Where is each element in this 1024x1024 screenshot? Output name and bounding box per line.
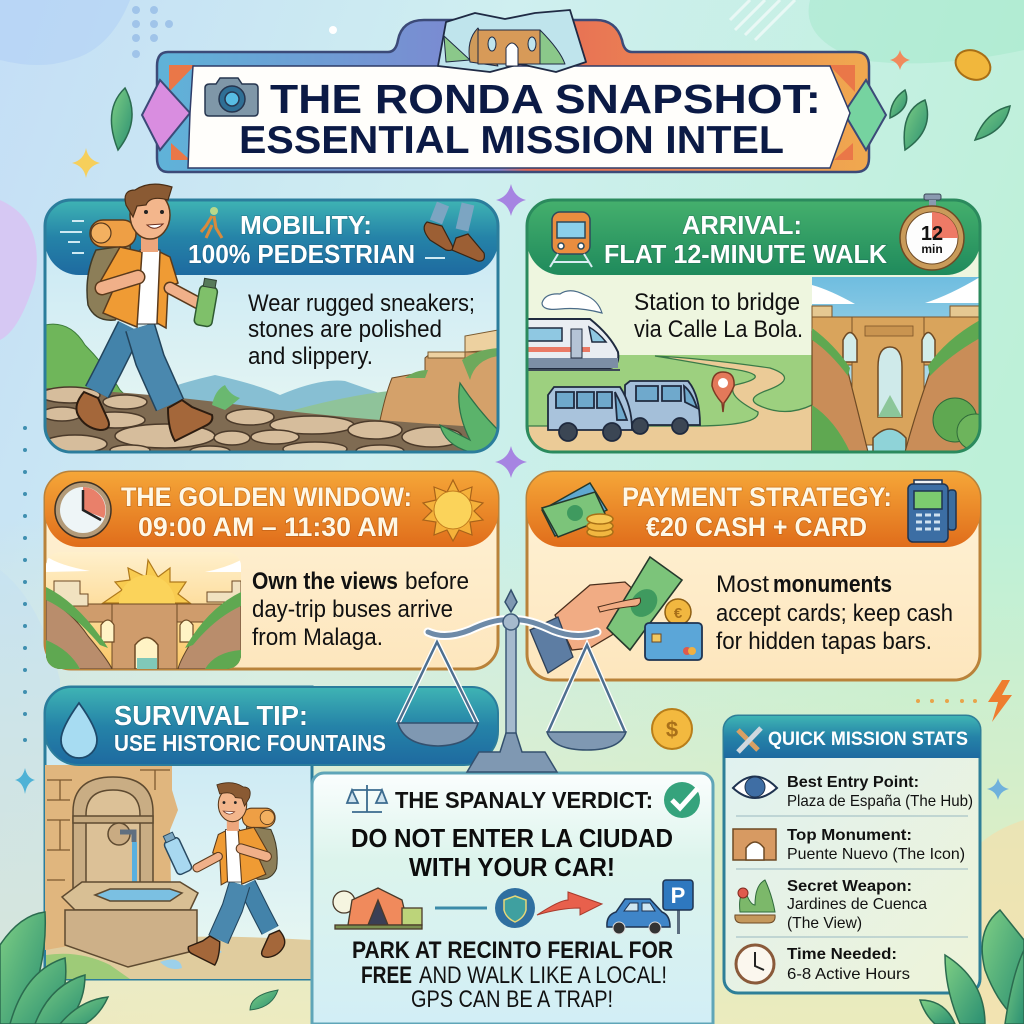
heading: mobility: MOBILITY:: [240, 210, 372, 240]
text: verdict advice: GPS CAN BE A TRAP!: [411, 986, 613, 1013]
stat: time needed: 6-8 Active Hours: [787, 966, 910, 983]
text: verdict advice: [352, 937, 673, 1013]
panel: verdict: [312, 773, 713, 1024]
character: hiker: [76, 184, 219, 441]
mobility scene: [40, 324, 500, 457]
text: golden body: from Malaga.: [252, 624, 383, 651]
text: payment body: [716, 571, 953, 655]
banner plaque: [188, 66, 850, 168]
icon: stopwatch: min: [921, 242, 943, 256]
stat: secret weapon: Jardines de Cuenca: [787, 896, 927, 913]
fountain: [62, 777, 198, 967]
stat: secret weapon: (The View): [787, 915, 862, 932]
icon: sun: [423, 480, 483, 541]
heading: payment: PAYMENT STRATEGY:: [622, 482, 892, 512]
sunrise scene: [46, 552, 241, 669]
arrival frame: [527, 200, 980, 452]
icon: fairground tent: [333, 888, 422, 929]
illustration: hand with cash: €: [674, 605, 683, 622]
heading: verdict: THE SPANALY VERDICT:: [395, 787, 653, 813]
payment header band: [527, 472, 980, 547]
bridge view: [812, 277, 993, 452]
icon: stopwatch: [900, 194, 964, 270]
stats header band: [724, 716, 980, 758]
text: golden body: Own the views: [252, 568, 398, 595]
stat: top monument: [733, 827, 965, 863]
icon: tools: [738, 728, 761, 752]
text: verdict advice: AND WALK LIKE A LOCAL!: [419, 962, 667, 989]
decoration: leaves top: [111, 88, 1010, 150]
fountain scene: [45, 765, 312, 979]
text: arrival body: via Calle La Bola.: [634, 316, 803, 343]
heading: arrival: ARRIVAL:: [682, 210, 802, 240]
text: verdict advice: PARK AT RECINTO FERIAL FOR: [352, 937, 673, 964]
heading: golden window: [121, 482, 412, 542]
panel: arrival: [527, 194, 993, 455]
text: golden body: before: [405, 568, 469, 595]
icon: car and parking: P: [671, 883, 685, 908]
banner frame: [157, 20, 869, 172]
train: [527, 319, 620, 370]
decoration: leaves bottom right: [920, 910, 1024, 1024]
text: mobility body: stones are polished: [248, 316, 442, 343]
title line 2: ESSENTIAL MISSION INTEL: [239, 119, 784, 162]
gem left: [142, 80, 190, 150]
heading: stats: QUICK MISSION STATS: [768, 729, 968, 750]
heading: arrival: FLAT 12-MINUTE WALK: [604, 239, 887, 269]
mobility frame: [45, 200, 498, 452]
text: mobility body: and slippery.: [248, 343, 373, 370]
stat: best entry point: Best Entry Point:: [787, 774, 919, 791]
icon: shield: [495, 888, 535, 928]
heading: golden window: THE GOLDEN WINDOW:: [121, 482, 412, 512]
heading: payment: €20 CASH + CARD: [646, 512, 867, 542]
speed lines: [60, 221, 84, 253]
text: golden body: day-trip buses arrive: [252, 596, 453, 623]
golden header band: [45, 472, 498, 547]
text: mobility body: Wear rugged sneakers;: [248, 290, 475, 317]
icon: balance scale: [398, 590, 626, 772]
decoration: leaf: [250, 990, 278, 1010]
text: verdict advice: FREE: [361, 962, 412, 989]
heading: survival tip: [114, 700, 386, 756]
heading: payment: [622, 482, 892, 542]
connector line: [435, 906, 487, 910]
headline: do not enter: WITH YOUR CAR!: [409, 852, 615, 882]
text: mobility body: [248, 290, 475, 370]
stat: best entry point: [733, 774, 973, 810]
decoration: leaves bottom left: [0, 912, 108, 1024]
icon: water drop: [61, 703, 97, 758]
headline: do not enter: [351, 823, 673, 882]
stat: best entry point: Plaza de España (The Hub): [787, 793, 973, 810]
mobility header band: [45, 200, 498, 275]
panel: mobility: [40, 184, 500, 457]
title banner: [142, 10, 886, 172]
cloud: [542, 291, 602, 313]
text: golden body: [252, 568, 469, 651]
icon: walker: [201, 207, 222, 238]
panel: survival tip: [45, 687, 498, 979]
stat: time needed: [736, 945, 910, 983]
stat: secret weapon: [735, 878, 927, 932]
icon: card terminal: [908, 480, 956, 542]
decoration: coin top right: [951, 45, 995, 85]
coin: [652, 709, 692, 749]
illustration: hand with cash: [530, 557, 702, 673]
heading: arrival: [604, 210, 887, 269]
buses: [548, 381, 700, 441]
text: arrival body: [634, 289, 803, 343]
icon: car and parking: [607, 880, 693, 934]
panel: golden window: [45, 472, 498, 669]
heading: mobility: 100% PEDESTRIAN: [188, 239, 415, 269]
text: payment body: Most: [716, 571, 769, 598]
arrow: [537, 892, 602, 915]
icon: clock: [55, 482, 111, 538]
survival header band: [45, 687, 498, 765]
stat: top monument: Puente Nuevo (The Icon): [787, 846, 965, 863]
coin: $: [666, 717, 678, 742]
arrival scene: [527, 277, 993, 455]
heading: mobility: [188, 210, 415, 269]
icon: boots: [424, 204, 484, 261]
icon: train: [550, 212, 592, 267]
decoration: dotted lines and lightning: [23, 426, 1012, 742]
title line 1: THE RONDA SNAPSHOT:: [270, 76, 821, 122]
text: payment body: accept cards; keep cash: [716, 600, 953, 627]
text: payment body: monuments: [773, 571, 892, 598]
panel: payment: [527, 472, 980, 680]
text: arrival body: Station to bridge: [634, 289, 800, 316]
arrival header band: [527, 200, 980, 275]
stat: time needed: Time Needed:: [787, 946, 897, 963]
banner corners: [169, 65, 855, 160]
map icon: [438, 10, 586, 72]
headline: do not enter: DO NOT ENTER LA CIUDAD: [351, 823, 673, 853]
gem right: [844, 80, 886, 150]
stat: secret weapon: Secret Weapon:: [787, 878, 912, 895]
icon: stopwatch: 12: [921, 223, 943, 245]
text: payment body: for hidden tapas bars.: [716, 628, 932, 655]
map pin: [712, 372, 734, 412]
icon: small scales: [347, 785, 387, 812]
icon: check badge: [664, 782, 700, 818]
panel: quick mission stats: [724, 716, 980, 993]
icon: cash and coins: [542, 483, 613, 537]
icon: camera: [205, 78, 258, 116]
decoration: sparkles: [15, 50, 1009, 800]
character: hiker at fountain: [161, 783, 285, 965]
stat: top monument: Top Monument:: [787, 827, 912, 844]
heading: survival tip: SURVIVAL TIP:: [114, 700, 308, 731]
heading: golden window: 09:00 AM – 11:30 AM: [138, 512, 399, 542]
heading: survival tip: USE HISTORIC FOUNTAINS: [114, 730, 386, 756]
